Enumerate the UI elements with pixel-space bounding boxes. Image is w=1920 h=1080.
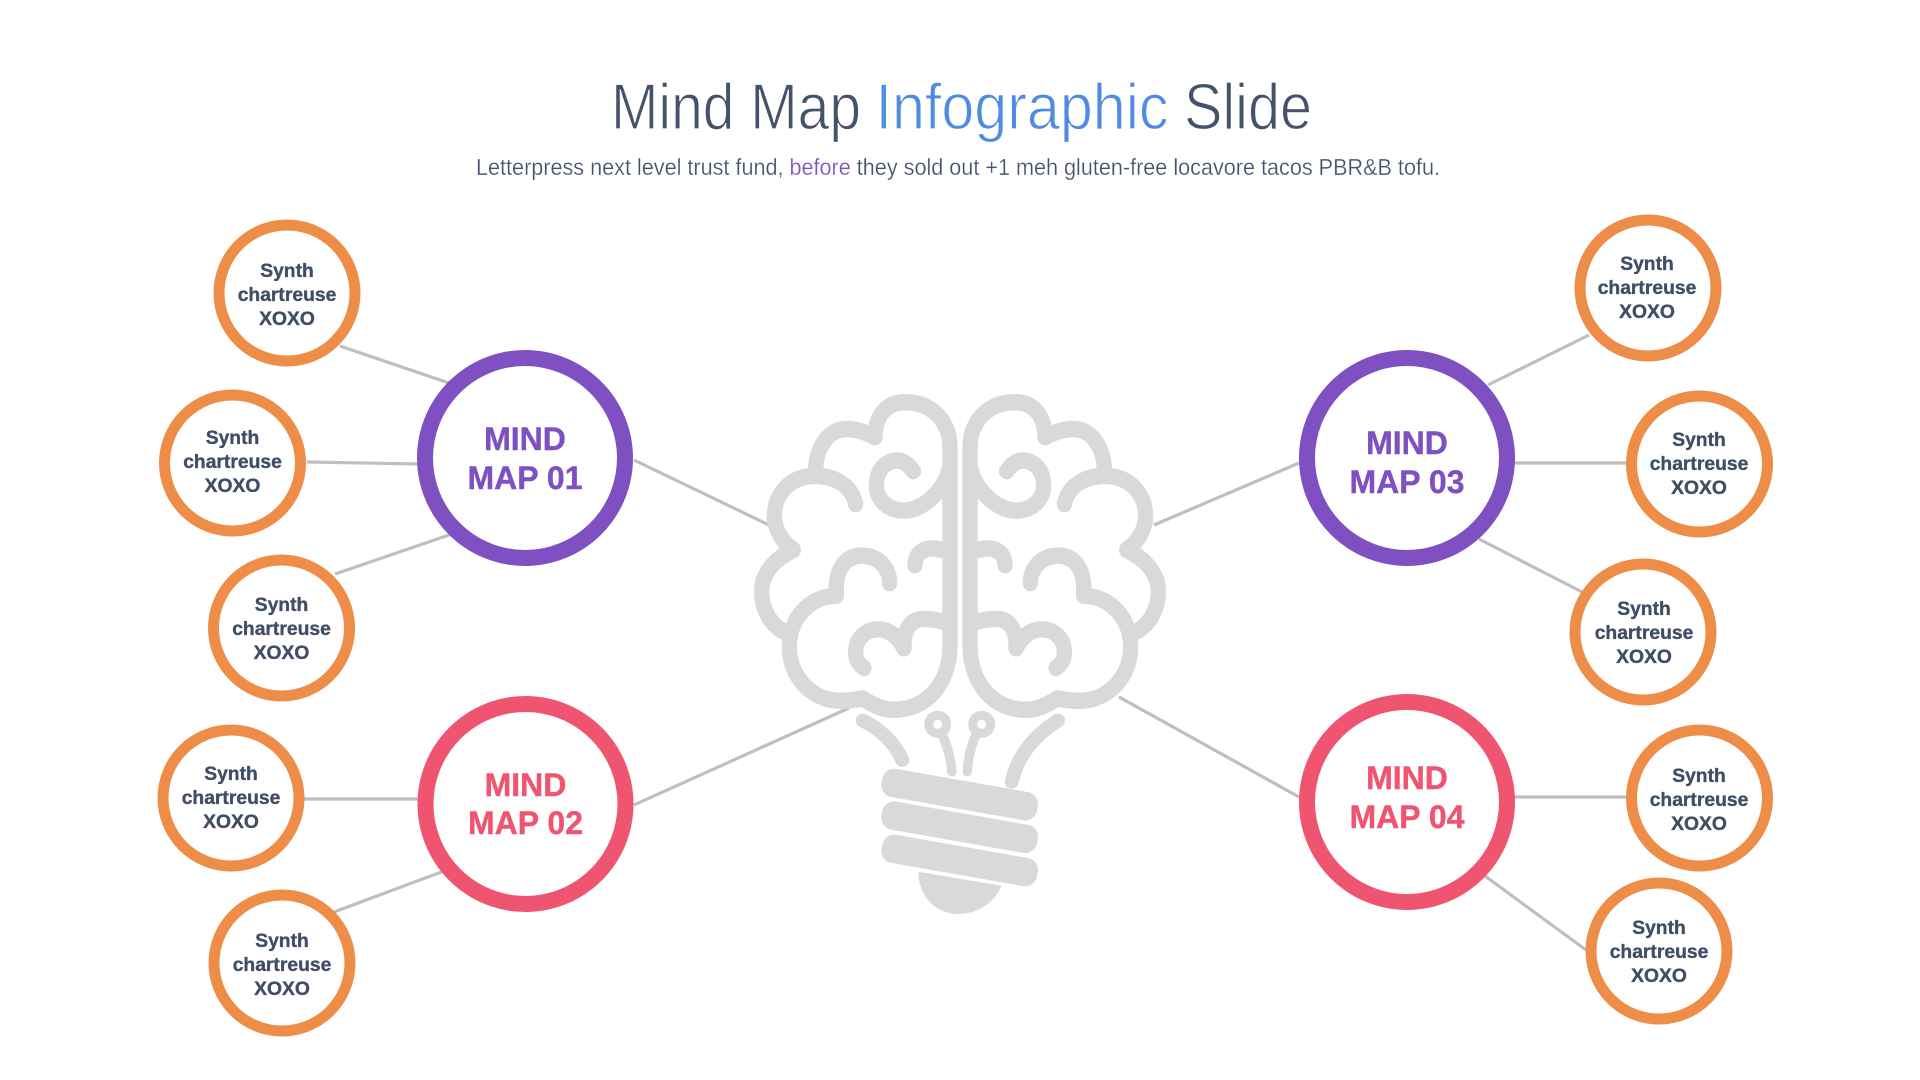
node: map 03 item 1 [1580, 220, 1716, 356]
node: map 03 item 1: Synth [1620, 254, 1674, 275]
title: Mind Map [611, 70, 861, 143]
brain right hemisphere [970, 402, 1158, 710]
panel: mind map 03 [1307, 358, 1507, 558]
panel: mind map 04 [1307, 702, 1507, 902]
node: map 02 item 1: Synth [204, 764, 258, 785]
panel: mind map 01: MAP 01 [467, 460, 583, 496]
node: map 03 item 1: chartreuse [1598, 278, 1697, 299]
connector lines [304, 335, 1627, 950]
node: map 01 item 1: chartreuse [238, 285, 337, 306]
node: map 04 item 2: chartreuse [1610, 942, 1709, 963]
node: map 02 item 2 [214, 895, 350, 1031]
panel: mind map 02: MIND [485, 767, 566, 803]
node: map 03 item 3 [1575, 564, 1711, 700]
node: map 03 item 2: chartreuse [1650, 454, 1749, 475]
node: map 04 item 2: Synth [1632, 918, 1686, 939]
node: map 02 item 1: XOXO [203, 812, 259, 833]
title: Infographic [876, 70, 1168, 143]
node: map 01 item 3: Synth [255, 595, 308, 616]
node: map 01 item 3 [214, 560, 350, 696]
node: map 02 item 2: Synth [255, 931, 309, 952]
node: map 04 item 1: XOXO [1671, 814, 1727, 835]
node: map 01 item 2: chartreuse [183, 452, 282, 473]
panel: mind map 01: MIND [484, 421, 566, 457]
node: map 03 item 2 [1632, 396, 1768, 532]
node: map 02 item 1: chartreuse [182, 788, 281, 809]
node: map 03 item 2: XOXO [1671, 478, 1727, 499]
node: map 01 item 3: chartreuse [232, 619, 331, 640]
node: map 04 item 2: XOXO [1631, 966, 1687, 987]
node: map 03 item 2: Synth [1672, 430, 1726, 451]
node: map 01 item 1 [219, 225, 355, 361]
subtitle: Letterpress next level trust fund, before they sold out +1 meh gluten-free locavore tacos PBR&B tofu. [476, 154, 1440, 180]
node: map 04 item 1: Synth [1672, 766, 1726, 787]
title [611, 70, 1312, 143]
brain left hemisphere [762, 402, 950, 710]
node: map 01 item 2: Synth [206, 428, 259, 449]
node: map 04 item 1: chartreuse [1650, 790, 1749, 811]
panel: mind map 01 [425, 358, 625, 558]
node: map 01 item 2: XOXO [205, 476, 260, 497]
panel: mind map 02: MAP 02 [468, 805, 583, 841]
panel: mind map 03: MIND [1366, 425, 1448, 461]
panel: mind map 02 [426, 704, 626, 904]
bulb base [879, 767, 1040, 914]
icon: brain light bulb [762, 402, 1158, 914]
panel: mind map 03: MAP 03 [1349, 464, 1465, 500]
panel: mind map 04: MAP 04 [1349, 799, 1465, 835]
node: map 04 item 1 [1632, 730, 1768, 866]
node: map 02 item 2: chartreuse [233, 955, 332, 976]
node: map 02 item 2: XOXO [254, 979, 310, 1000]
node: map 01 item 2 [164, 395, 300, 531]
node: map 01 item 3: XOXO [254, 643, 309, 664]
panel: mind map 04: MIND [1366, 760, 1448, 796]
node: map 03 item 3: XOXO [1616, 647, 1672, 668]
node: map 04 item 2 [1591, 883, 1727, 1019]
bulb glass and filaments [863, 715, 1058, 782]
title: Slide [1184, 70, 1312, 143]
node: map 01 item 1: XOXO [259, 309, 315, 330]
node: map 02 item 1 [163, 730, 299, 866]
node: map 03 item 3: chartreuse [1595, 623, 1694, 644]
node: map 03 item 1: XOXO [1619, 302, 1675, 323]
node: map 03 item 3: Synth [1617, 599, 1671, 620]
node: map 01 item 1: Synth [260, 261, 314, 282]
